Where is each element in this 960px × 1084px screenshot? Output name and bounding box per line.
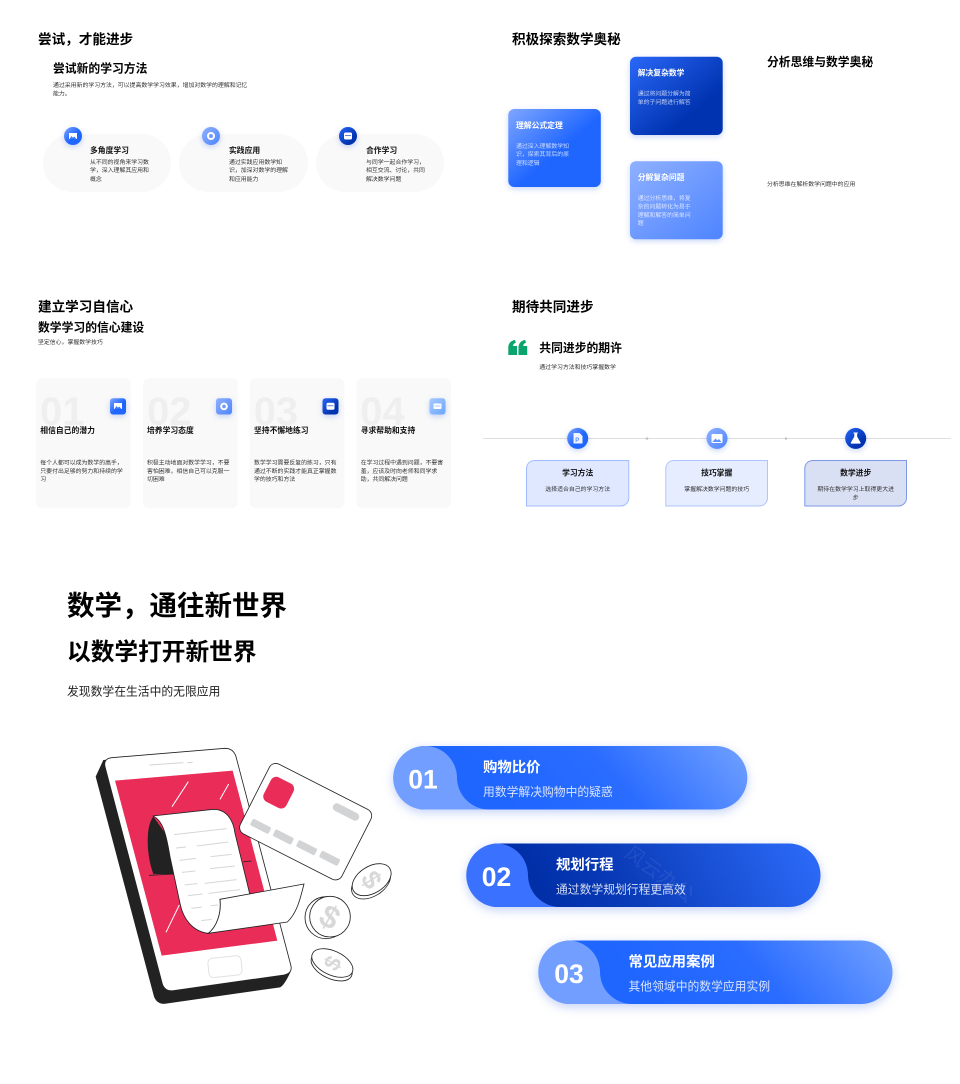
timeline line xyxy=(483,437,951,440)
icon: sofa xyxy=(322,398,338,414)
step: math progress xyxy=(805,428,906,506)
card: practical application xyxy=(179,127,308,192)
text: practical application detail: 通过实践应用数学知 xyxy=(229,160,282,166)
pill: 01 shopping comparison xyxy=(393,746,747,810)
illustration: phone payment with receipt, card and coins: $ xyxy=(313,897,347,937)
number: 04: 04 xyxy=(360,390,406,434)
card: 01 believe xyxy=(36,378,131,508)
label: believe: 相信自己的潜力 xyxy=(40,425,95,435)
pill: 03 common cases xyxy=(538,940,892,1004)
text: practice detail: 通过不断的实践才能真正掌握数 xyxy=(254,467,337,475)
card: 04 seek help xyxy=(356,378,451,508)
label: technique mastery: 技巧掌握 xyxy=(701,468,732,478)
icon: document: P xyxy=(575,438,579,444)
box: technique mastery xyxy=(666,460,768,506)
illustration: phone payment with receipt, card and coins: $ xyxy=(355,866,388,894)
number: 02: 02 xyxy=(147,390,192,434)
panel: build confidence xyxy=(36,299,451,508)
title: math gateway: 数学，通往新世界 xyxy=(67,590,287,621)
subheading: shared promise: 共同进步的期许 xyxy=(539,341,622,355)
text: cooperative learning detail: 相互交流、讨论，共同 xyxy=(366,166,425,174)
icon: picture xyxy=(706,428,728,449)
icon: quote mark xyxy=(508,340,527,355)
label: attitude: 培养学习态度 xyxy=(147,425,194,435)
illustration: phone payment with receipt, card and coins xyxy=(96,748,397,1004)
label: common cases: 常见应用案例 xyxy=(628,952,715,970)
text block: methods intro: 能力。 xyxy=(53,90,71,98)
text: attitude detail: 积极主动地面对数学学习，不要 xyxy=(147,460,229,466)
text: understand formulas detail: 识，探索其背后的原 xyxy=(516,150,569,158)
card: solve complex math xyxy=(630,57,723,135)
subheading: analytical thinking: 分析思维与数学奥秘 xyxy=(767,55,873,69)
text block: analytical thinking detail: 分析思维在解析数学问题中的应用 xyxy=(767,180,855,188)
text: trip planning detail: 通过数学规划行程更高效 xyxy=(556,882,686,896)
text: believe detail: 每个人都可以成为数学的高手， xyxy=(40,460,123,466)
subtitle: open a new world: 以数学打开新世界 xyxy=(67,639,257,666)
label: solve complex math: 解决复杂数学 xyxy=(638,68,685,78)
text: math progress detail: 步 xyxy=(853,494,859,502)
text: attitude detail: 切困难 xyxy=(147,475,165,483)
text: believe detail: 习 xyxy=(40,476,46,483)
label: multiple angles: 多角度学习 xyxy=(90,145,129,155)
text: technique mastery detail: 掌握解决数学问题的技巧 xyxy=(684,485,749,493)
main heading block xyxy=(67,590,287,698)
heading: explore mysteries: 积极探索数学奥秘 xyxy=(512,31,621,47)
text block: shared promise detail: 通过学习方法和技巧掌握数学 xyxy=(539,363,616,371)
text: believe detail: 只要付出足够的努力和持续的学 xyxy=(40,467,123,475)
panel: explore math mysteries xyxy=(508,31,873,239)
text: cooperative learning detail: 解决数学问题 xyxy=(366,175,401,183)
text: learning methods detail: 选择适合自己的学习方法 xyxy=(545,485,610,493)
number: 03: 03 xyxy=(254,390,298,434)
label: seek help: 寻求帮助和支持 xyxy=(361,425,415,435)
text: solve complex math detail: 单的子问题进行解答 xyxy=(638,98,691,106)
icon: flask xyxy=(845,428,866,449)
heading: progress together: 期待共同进步 xyxy=(512,299,594,315)
number: 01: 01 xyxy=(408,764,438,794)
text: decompose problems detail: 通过分析思维，将复 xyxy=(638,196,691,202)
box: math progress xyxy=(805,460,906,506)
text: understand formulas detail: 通过深入理解数学知 xyxy=(516,144,569,150)
text: decompose problems detail: 理解和解答的简单问 xyxy=(638,211,691,219)
text: practice detail: 数学学习需要反复的练习，只有 xyxy=(254,460,336,466)
number: 01: 01 xyxy=(40,390,84,434)
text: common cases detail: 其他领域中的数学应用实例 xyxy=(628,980,770,994)
icon: image xyxy=(64,127,82,145)
text: decompose problems detail: 题 xyxy=(638,220,644,227)
card: 03 practice xyxy=(250,378,344,508)
text: cooperative learning detail: 与同学一起合作学习， xyxy=(366,160,425,166)
label: decompose problems: 分解复杂问题 xyxy=(638,172,685,182)
label: math progress: 数学进步 xyxy=(840,468,871,478)
text: shopping comparison detail: 用数学解决购物中的疑惑 xyxy=(483,785,613,799)
text: seek help detail: 在学习过程中遇到问题，不要害 xyxy=(361,460,443,466)
card: understand formulas xyxy=(508,109,601,187)
icon: gear xyxy=(216,398,232,414)
heading: try to progress: 尝试，才能进步 xyxy=(38,31,133,47)
card: cooperative learning xyxy=(316,127,444,192)
box: learning methods xyxy=(526,460,629,506)
card: 02 attitude xyxy=(143,378,238,508)
text: seek help detail: 羞，应该及时向老师和同学求 xyxy=(361,467,437,475)
icon: chat xyxy=(430,398,446,414)
icon: gear xyxy=(202,127,220,145)
label: practice: 坚持不懈地练习 xyxy=(254,425,309,435)
text: attitude detail: 害怕困难，相信自己可以克服一 xyxy=(147,467,230,475)
text: decompose problems detail: 杂的问题转化为易于 xyxy=(638,202,691,210)
text block: applications in life: 发现数学在生活中的无限应用 xyxy=(67,684,220,698)
icon: sofa xyxy=(339,127,357,145)
text: multiple angles detail: 概念 xyxy=(90,175,102,183)
heading: build confidence: 建立学习自信心 xyxy=(38,299,134,315)
label: practical application: 实践应用 xyxy=(229,145,260,155)
text: practical application detail: 和应用能力 xyxy=(229,175,259,183)
card: decompose problems xyxy=(630,161,723,239)
text block: confidence intro: 坚定信心，掌握数学技巧 xyxy=(38,338,103,346)
label: shopping comparison: 购物比价 xyxy=(483,758,541,776)
icon: image xyxy=(110,398,126,414)
card: multiple angles xyxy=(43,127,171,192)
panel: progress together xyxy=(483,299,951,506)
text block: methods intro: 通过采用新的学习方法，可以提高数学学习效果，增加对数学的理解和记忆 xyxy=(53,83,247,89)
text: practical application detail: 识，加深对数学的理解 xyxy=(229,166,288,174)
text: multiple angles detail: 学，深入理解其应用和 xyxy=(90,166,149,174)
label: cooperative learning: 合作学习 xyxy=(366,145,397,155)
subheading: confidence building: 数学学习的信心建设 xyxy=(38,321,144,335)
text: understand formulas detail: 理和逻辑 xyxy=(516,159,540,167)
step: learning methods xyxy=(526,428,629,506)
label: learning methods: 学习方法 xyxy=(562,468,593,478)
number: 03: 03 xyxy=(554,959,584,989)
step: technique mastery xyxy=(666,428,768,506)
number: 02: 02 xyxy=(482,862,511,892)
illustration: phone payment with receipt, card and coins: $ xyxy=(318,951,347,975)
subheading: new learning methods: 尝试新的学习方法 xyxy=(53,62,148,76)
label: trip planning: 规划行程 xyxy=(556,856,614,874)
label: understand formulas: 理解公式定理 xyxy=(516,120,563,130)
text: math progress detail: 期待在数学学习上取得更大进 xyxy=(817,487,894,493)
watermark: 风云办公 xyxy=(620,841,698,907)
pill: 02 trip planning xyxy=(466,841,820,907)
text: solve complex math detail: 通过将问题分解为简 xyxy=(638,92,691,98)
text: seek help detail: 助，共同解决问题 xyxy=(361,475,408,483)
text: multiple angles detail: 从不同的视角来学习数 xyxy=(90,160,149,166)
panel: try new methods xyxy=(38,31,444,192)
text: practice detail: 学的技巧和方法 xyxy=(254,475,295,483)
